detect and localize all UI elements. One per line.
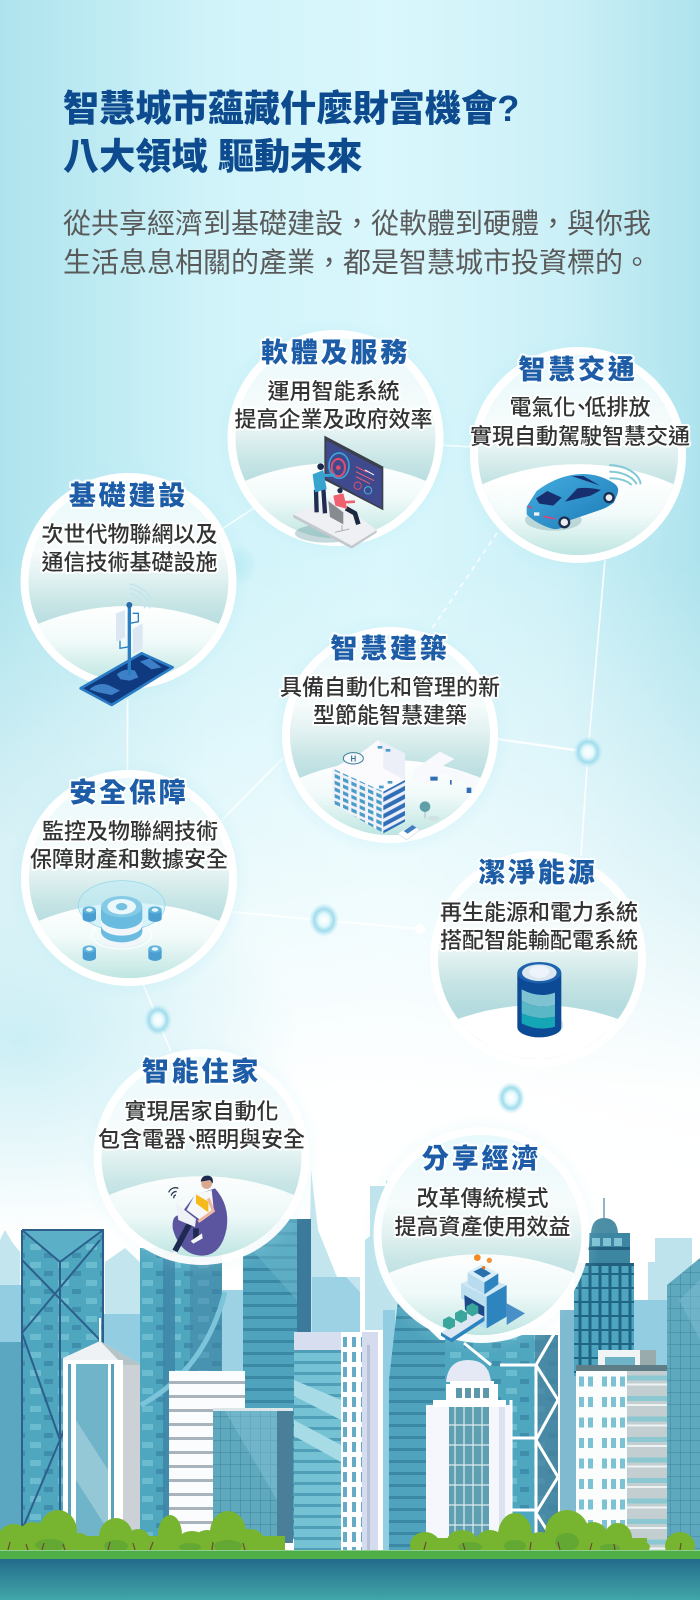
tower: lattice left: [22, 1230, 103, 1540]
glowing nodes: [144, 545, 603, 1114]
heading: 分享經濟: [422, 1143, 541, 1174]
panel: 分享經濟: [362, 1115, 602, 1355]
description: 實現居家自動化: [124, 1099, 279, 1124]
tower: tapered teal: [389, 1300, 445, 1552]
panel: 安全保障: [7, 756, 251, 1000]
tower: teal centre left: [140, 1248, 225, 1538]
intro paragraph: [63, 208, 651, 278]
tower: domed white: [426, 1360, 511, 1545]
description: 搭配智能輸配電系統: [440, 928, 638, 953]
intro paragraph: 生活息息相關的產業，都是智慧城市投資標的。: [63, 247, 651, 278]
description: 電氣化、低排放: [509, 395, 651, 420]
heading: 智慧建築: [330, 634, 450, 664]
panel: 智慧交通: [456, 333, 700, 577]
heading: 智能住家: [142, 1056, 261, 1087]
tower: domed dark: [574, 1198, 634, 1376]
water: [0, 1559, 700, 1600]
intro paragraph: 從共享經濟到基礎建設，從軟體到硬體，與你我: [63, 208, 651, 239]
tower: white lattice: [445, 1327, 558, 1545]
description: 改革傳統模式: [416, 1186, 549, 1211]
description: 型節能智慧建築: [313, 703, 467, 728]
description: 具備自動化和管理的新: [280, 675, 500, 700]
tower: white striped: [169, 1371, 245, 1541]
panel: 智能住家: [82, 1037, 322, 1277]
panel: 基礎建設: [6, 459, 250, 705]
tower: glass block: [213, 1408, 293, 1543]
grass strip: [0, 1550, 700, 1559]
icon: car: [525, 465, 641, 531]
tower: right edge: [667, 1258, 700, 1552]
icon: smart building: H: [350, 754, 356, 763]
description: 監控及物聯網技術: [42, 819, 218, 844]
description: 包含電器、照明與安全: [98, 1127, 305, 1152]
icon: conveyor factory: [441, 1254, 525, 1342]
description: 運用智能系統: [267, 379, 400, 404]
description: 通信技術基礎設施: [41, 550, 218, 575]
tower: teal striped: [243, 1219, 311, 1539]
heading: 潔淨能源: [478, 858, 598, 888]
panel: 智慧建築: [268, 613, 512, 857]
description: 提高資產使用效益: [394, 1214, 571, 1240]
heading: 軟體及服務: [261, 338, 410, 368]
description: 實現自動駕駛智慧交通: [470, 424, 690, 449]
tower: white peaked: [63, 1318, 141, 1544]
panel: 潔淨能源: [426, 847, 650, 1071]
tower: teal and white: [294, 1332, 378, 1552]
heading: 智慧交通: [518, 354, 638, 385]
description: 次世代物聯網以及: [41, 522, 218, 547]
connector lines: [128, 445, 605, 1052]
icon: monitor and people: [293, 436, 383, 549]
panel: 軟體及服務: [214, 316, 458, 560]
icon: smart building: [332, 740, 478, 840]
title: 智慧城市蘊藏什麼財富機會?: [63, 88, 519, 129]
heading: 安全保障: [69, 777, 189, 808]
title: 八大領域 驅動未來: [63, 136, 363, 177]
bushes: [0, 1510, 695, 1560]
description: 提高企業及政府效率: [234, 407, 433, 432]
icon: battery: [517, 962, 563, 1037]
icon: antenna on smartphone map: [81, 584, 173, 705]
icon: person on beanbag: [166, 1176, 227, 1257]
tower: white office: [576, 1350, 679, 1551]
icon: data storage: [78, 881, 165, 961]
description: 保障財產和數據安全: [30, 847, 228, 872]
title: [63, 88, 519, 177]
heading: 基礎建設: [69, 481, 188, 511]
description: 再生能源和電力系統: [440, 900, 638, 925]
far background buildings: [0, 1170, 692, 1550]
city skyline: [0, 1170, 700, 1600]
